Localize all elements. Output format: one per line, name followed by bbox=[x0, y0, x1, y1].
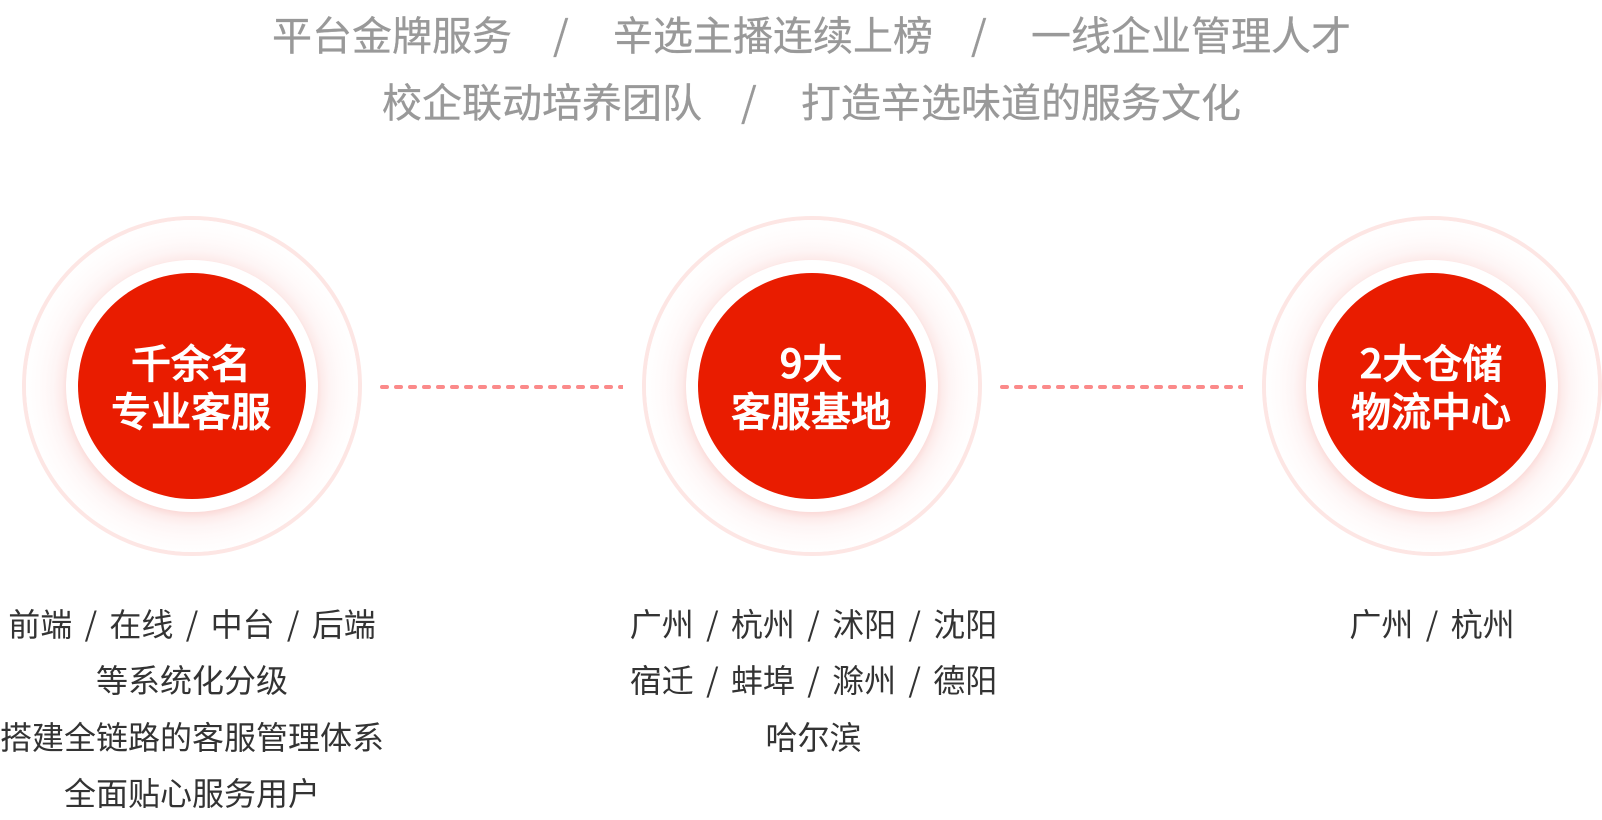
connector: second dashed line bbox=[1000, 385, 1243, 389]
badge: staff count: 千余名 bbox=[131, 332, 251, 390]
heading: top line one: 一线企业管理人才 bbox=[1031, 4, 1351, 62]
text block: staff description: 前端 / 在线 / 中台 / 后端 bbox=[8, 600, 376, 646]
text block: staff description bbox=[0, 600, 384, 815]
heading: top line two: 打造辛选味道的服务文化 bbox=[801, 71, 1241, 129]
heading: top line one: / bbox=[553, 4, 569, 62]
heading: top line one bbox=[272, 4, 1351, 62]
heading: top line one: / bbox=[971, 4, 987, 62]
badge: staff count: 专业客服 bbox=[111, 380, 271, 438]
heading: top line two: 校企联动培养团队 bbox=[382, 71, 702, 129]
text block: staff description: 搭建全链路的客服管理体系 bbox=[0, 713, 384, 759]
panel: customer service staff circle bbox=[22, 216, 362, 556]
badge: base count: 9大 bbox=[780, 332, 842, 390]
badge: base count: 客服基地 bbox=[731, 380, 891, 438]
badge: warehouse count bbox=[1318, 273, 1546, 499]
badge: staff count bbox=[78, 273, 306, 499]
text block: base cities bbox=[630, 600, 997, 759]
connector: first dashed line bbox=[380, 385, 623, 389]
text block: warehouse cities: 广州 / 杭州 bbox=[1349, 600, 1515, 646]
badge: warehouse count: 2大仓储 bbox=[1360, 332, 1502, 390]
badge: warehouse count: 物流中心 bbox=[1351, 380, 1511, 438]
heading: top line one: 辛选主播连续上榜 bbox=[613, 4, 933, 62]
panel: service bases circle bbox=[642, 216, 982, 556]
text block: base cities: 哈尔滨 bbox=[765, 713, 862, 759]
heading: top line two bbox=[382, 71, 1241, 129]
text block: staff description: 等系统化分级 bbox=[96, 656, 288, 702]
panel: warehouse circle bbox=[1262, 216, 1602, 556]
text block: staff description: 全面贴心服务用户 bbox=[64, 769, 320, 815]
heading: top line two: / bbox=[741, 71, 757, 129]
heading: top line one: 平台金牌服务 bbox=[272, 4, 512, 62]
badge: base count bbox=[698, 273, 926, 499]
text block: base cities: 广州 / 杭州 / 沭阳 / 沈阳 bbox=[630, 600, 997, 646]
text block: base cities: 宿迁 / 蚌埠 / 滁州 / 德阳 bbox=[630, 656, 997, 702]
